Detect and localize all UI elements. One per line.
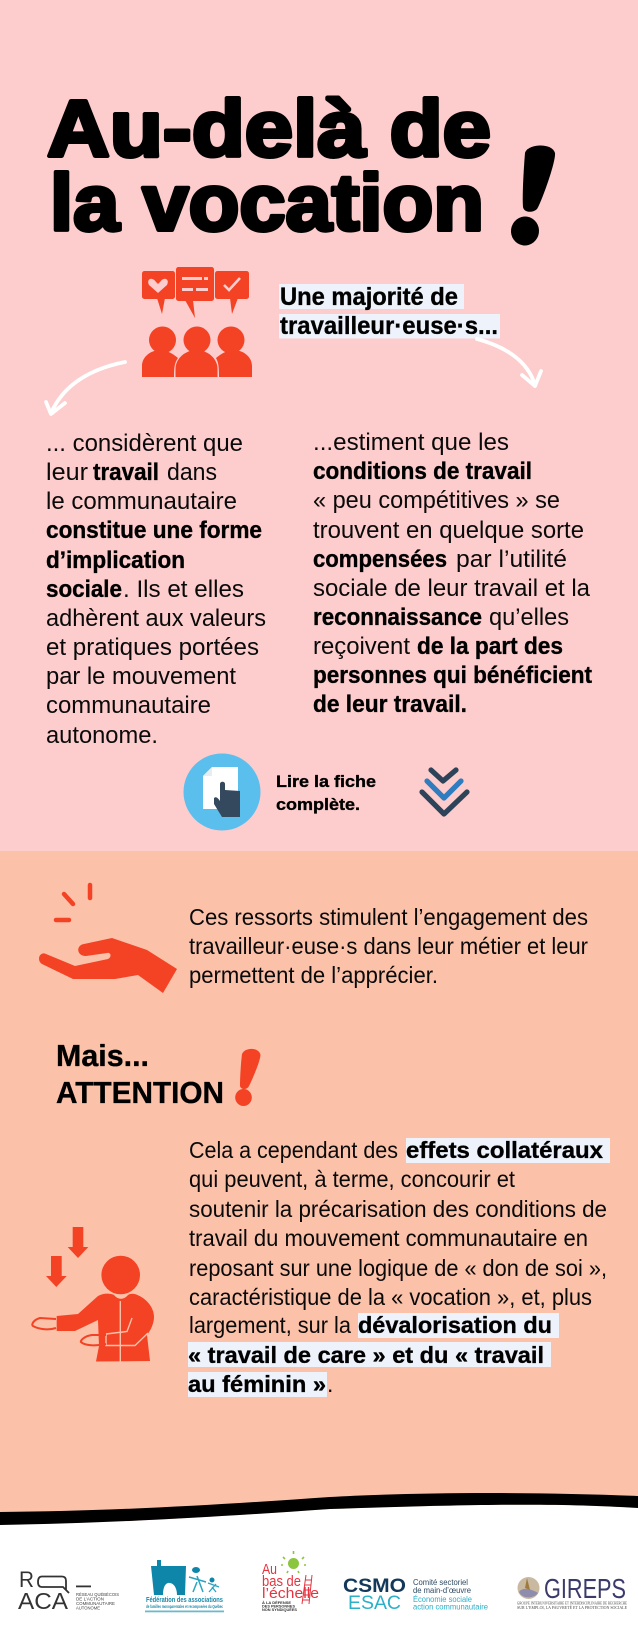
logo: CSMO ESAC: Comité sectoriel bbox=[413, 1578, 468, 1587]
logo: RQ ACA: ACA bbox=[18, 1588, 69, 1614]
text block: effets collatéraux: soutenir la précarisation des conditions de bbox=[189, 1196, 607, 1222]
text block: left column bbox=[46, 430, 266, 749]
text block: effets collatéraux: . bbox=[327, 1371, 333, 1397]
text: lire la fiche complète bbox=[276, 772, 376, 814]
text block: right column: par l’utilité bbox=[456, 546, 567, 573]
text block: ces ressorts bbox=[189, 904, 588, 988]
icon: group of people with speech bubbles bbox=[142, 267, 252, 377]
text block: effets collatéraux bbox=[188, 1137, 610, 1397]
logo: Au bas de l'échelle: À LA DÉFENSE bbox=[262, 1600, 291, 1605]
text: lire la fiche complète: Lire la fiche bbox=[276, 772, 376, 791]
icon: large exclamation mark bbox=[509, 145, 555, 247]
logo: CSMO ESAC: action communautaire bbox=[413, 1602, 489, 1612]
text block: right column: « peu compétitives » se bbox=[313, 487, 560, 514]
icon: open hand with sparks bbox=[39, 885, 177, 993]
white footer background bbox=[0, 1505, 638, 1650]
text block: left column: dans bbox=[167, 459, 217, 486]
text block: left column: constitue une forme bbox=[46, 517, 262, 544]
text block: left column: par le mouvement bbox=[46, 663, 236, 690]
text block: left column: adhèrent aux valeurs bbox=[46, 605, 266, 632]
logo: CSMO ESAC: CSMO bbox=[343, 1576, 406, 1597]
logo: Fédération des associations: de familles monoparentales et recomposées du Québec bbox=[146, 1604, 223, 1609]
subtitle: une majorité de travailleur·euse·s: travailleur·euse·s... bbox=[280, 312, 498, 340]
text block: effets collatéraux: effets collatéraux bbox=[406, 1137, 603, 1163]
icon: person with hands and down arrows bbox=[32, 1227, 154, 1362]
text block: left column: sociale bbox=[46, 576, 122, 603]
logo: Au bas de l'échelle: bas de bbox=[262, 1573, 301, 1590]
icon: orange exclamation mark bbox=[235, 1049, 260, 1106]
logo: RQ ACA: COMMUNAUTAIRE bbox=[76, 1601, 115, 1606]
text block: right column: de leur travail. bbox=[313, 691, 467, 718]
subtitle: une majorité de travailleur·euse·s: Une majorité de bbox=[280, 283, 458, 311]
heading: mais attention: Mais... bbox=[56, 1038, 149, 1073]
text block: effets collatéraux: travail du mouvement communautaire en bbox=[189, 1225, 588, 1251]
text block: effets collatéraux: qui peuvent, à terme, concourir et bbox=[189, 1166, 516, 1192]
logo: CSMO ESAC: Économie sociale bbox=[413, 1595, 473, 1604]
logo: Au bas de l'échelle bbox=[262, 1551, 319, 1612]
text block: right column: conditions de travail bbox=[313, 458, 532, 485]
logo: RQ ACA bbox=[18, 1567, 119, 1614]
text block: right column bbox=[313, 429, 592, 718]
text block: right column: reconnaissance bbox=[313, 604, 482, 631]
heading: mais attention: ATTENTION bbox=[56, 1075, 224, 1110]
logo: RQ ACA: DE L’ACTION bbox=[76, 1596, 104, 1602]
heading: mais attention bbox=[56, 1038, 224, 1110]
text: lire la fiche complète: complète. bbox=[276, 795, 360, 814]
logo: Fédération des associations bbox=[145, 1560, 224, 1612]
icon: triple chevron down bbox=[422, 770, 467, 814]
text block: right column: de la part des bbox=[417, 633, 563, 660]
logo: CSMO ESAC bbox=[343, 1576, 489, 1614]
text block: left column: et pratiques portées bbox=[46, 634, 259, 661]
arrow: left white curved bbox=[46, 362, 125, 414]
text block: effets collatéraux: reposant sur une logique de « don de soi », bbox=[189, 1255, 607, 1281]
text block: left column: . Ils et elles bbox=[123, 576, 244, 603]
text block: effets collatéraux: dévalorisation du bbox=[358, 1312, 552, 1338]
text block: right column: personnes qui bénéficient bbox=[313, 662, 592, 689]
text block: effets collatéraux: Cela a cependant des bbox=[189, 1137, 398, 1163]
text block: effets collatéraux: « travail de care » et du « travail bbox=[188, 1342, 544, 1368]
text block: effets collatéraux: au féminin » bbox=[188, 1371, 326, 1397]
subtitle: une majorité de travailleur·euse·s bbox=[279, 283, 500, 340]
logo: CSMO ESAC: ESAC bbox=[348, 1593, 401, 1614]
text block: right column: reçoivent bbox=[313, 633, 410, 660]
title: la vocation bbox=[50, 158, 484, 247]
wave footer divider bbox=[0, 1493, 638, 1525]
text block: right column: trouvent en quelque sorte bbox=[313, 517, 584, 544]
text block: right column: sociale de leur travail et la bbox=[313, 575, 591, 602]
background: pink panel bbox=[0, 0, 638, 851]
text block: ces ressorts: permettent de l’apprécier. bbox=[189, 962, 438, 988]
text block: left column: d’implication bbox=[46, 547, 185, 574]
text block: effets collatéraux: largement, sur la bbox=[189, 1312, 351, 1338]
text block: left column: autonome. bbox=[46, 722, 158, 749]
logo: Au bas de l'échelle: l’échelle bbox=[262, 1585, 319, 1602]
text block: left column: le communautaire bbox=[46, 488, 237, 515]
icon: document with pointing hand bbox=[184, 754, 260, 830]
text block: right column: ...estiment que les bbox=[313, 429, 509, 456]
arrow: right white curved bbox=[477, 339, 541, 386]
text block: effets collatéraux: caractéristique de la « vocation », et, plus bbox=[189, 1284, 592, 1310]
text block: left column: ... considèrent que bbox=[46, 430, 243, 457]
logo: GIREPS bbox=[517, 1573, 627, 1611]
logo: Fédération des associations: Fédération des associations bbox=[146, 1595, 223, 1604]
title bbox=[47, 84, 491, 247]
logo: RQ ACA: R bbox=[19, 1567, 34, 1592]
title: Au-delà de bbox=[47, 84, 491, 173]
text block: ces ressorts: Ces ressorts stimulent l’engagement des bbox=[189, 904, 588, 930]
logo: Au bas de l'échelle: Au bbox=[262, 1561, 277, 1578]
text block: right column: compensées bbox=[313, 546, 447, 573]
text block: right column: qu’elles bbox=[489, 604, 569, 631]
background: peach panel bbox=[0, 851, 638, 1521]
logo: Au bas de l'échelle: NON SYNDIQUÉES bbox=[262, 1607, 297, 1612]
logo: RQ ACA: AUTONOME bbox=[76, 1606, 100, 1610]
logo: RQ ACA: RÉSEAU QUÉBÉCOIS bbox=[76, 1591, 119, 1597]
text block: left column: leur bbox=[46, 459, 88, 486]
text block: ces ressorts: travailleur·euse·s dans leur métier et leur bbox=[189, 933, 588, 959]
text block: left column: communautaire bbox=[46, 692, 211, 719]
text block: left column: travail bbox=[93, 459, 159, 486]
logo: CSMO ESAC: de main-d’œuvre bbox=[413, 1586, 472, 1595]
logo: Au bas de l'échelle: DES PERSONNES bbox=[262, 1604, 295, 1608]
